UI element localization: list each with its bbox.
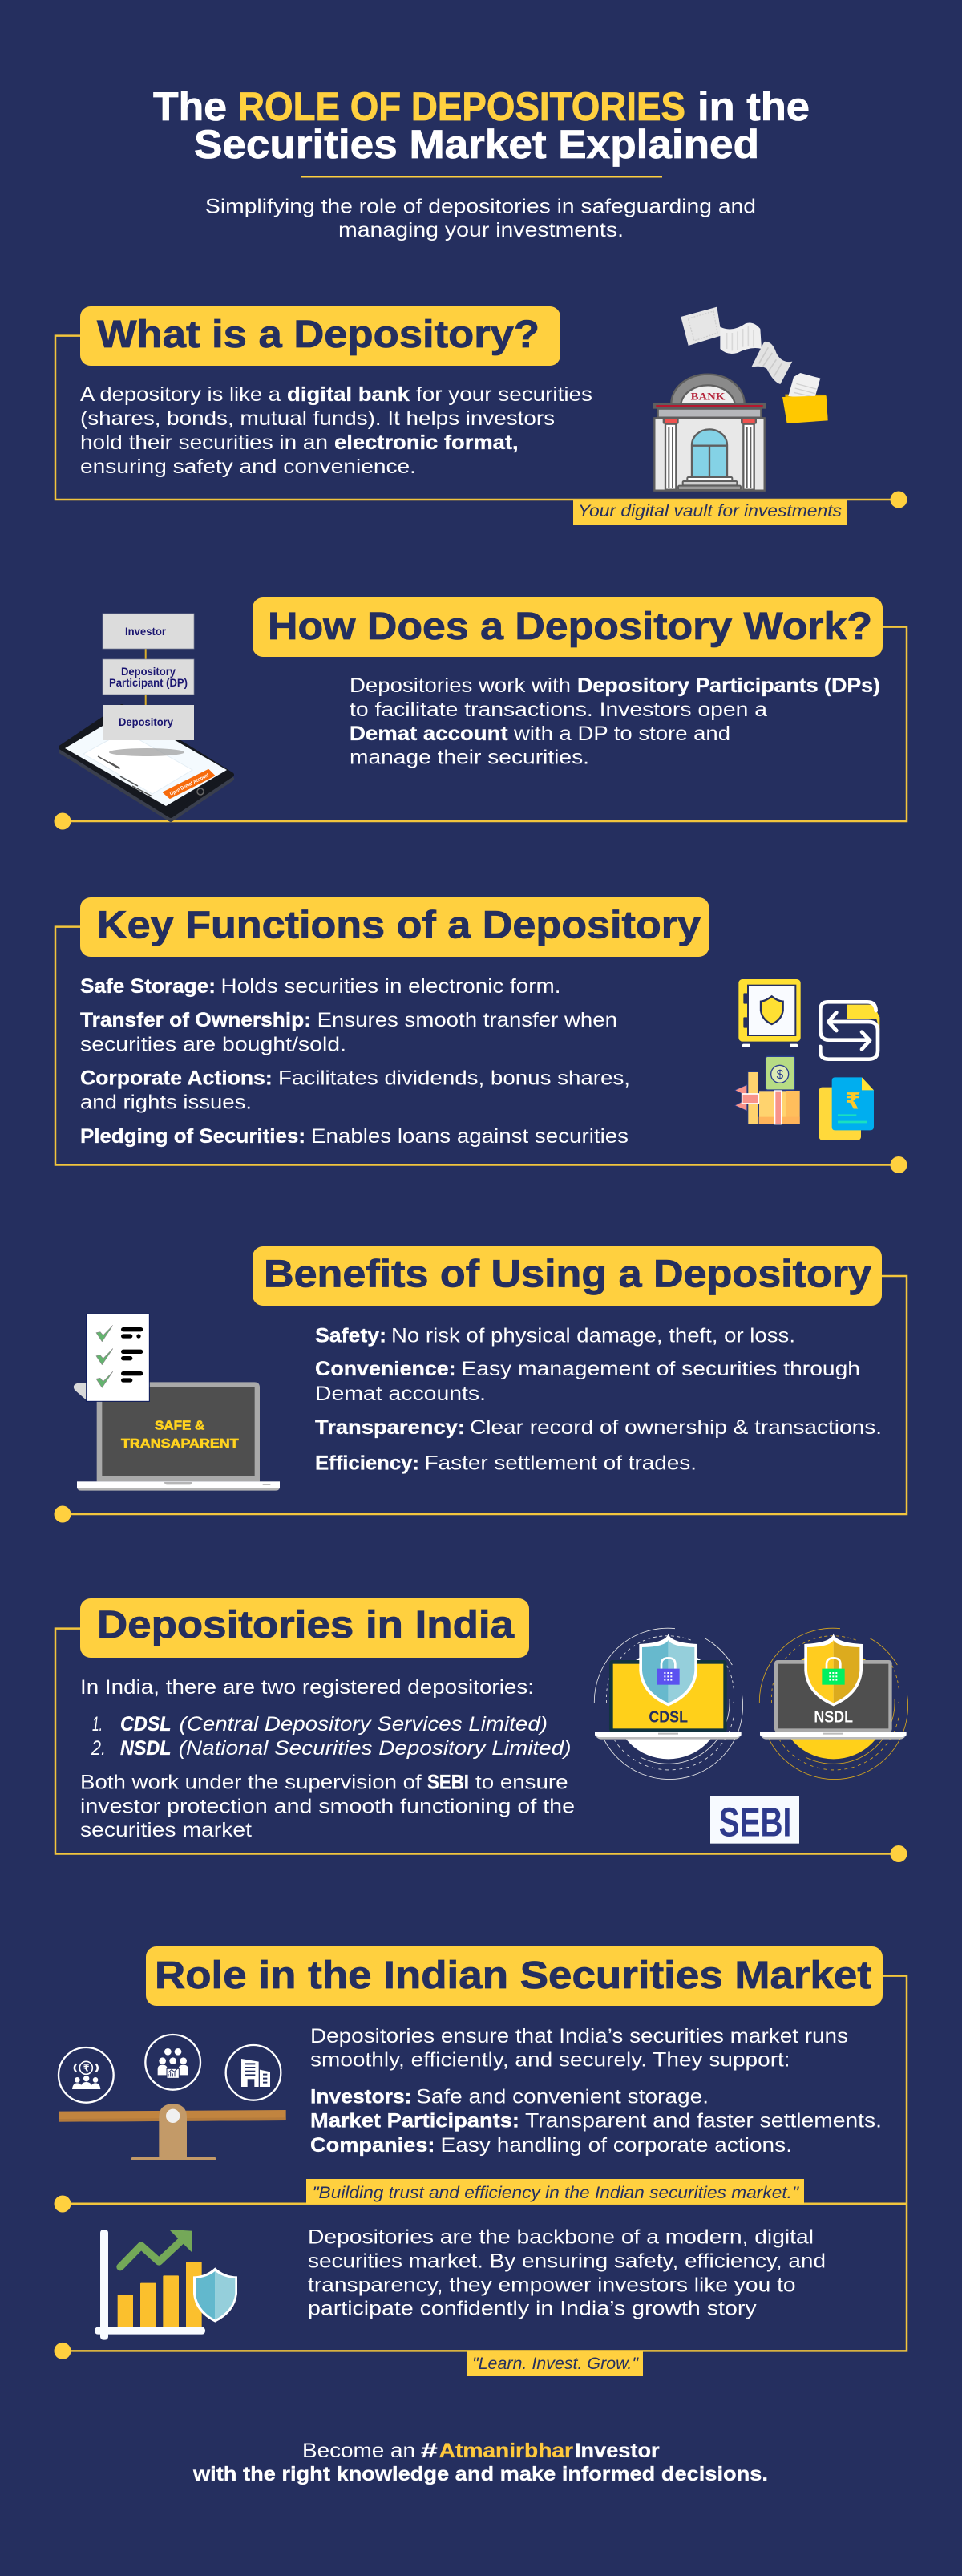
subtitle — [205, 196, 756, 241]
text block: backbone — [308, 2226, 826, 2320]
text block: Demat account — [350, 723, 508, 745]
text block: with a DP to store and — [513, 723, 730, 745]
text block: Clear record of ownership & transactions. — [470, 1416, 882, 1439]
icon: phone with demat account screen: Open Demat Account — [169, 772, 211, 797]
icon: sebi logo: SEBI — [719, 1799, 791, 1845]
icon: nsdl badge: NSDL — [814, 1708, 853, 1726]
heading — [253, 597, 883, 657]
callout — [467, 2351, 643, 2376]
panel: how does a depository work — [55, 597, 907, 829]
text block: Transfer of Ownership: — [80, 1009, 311, 1031]
heading: Key Functions of a Depository — [97, 905, 701, 946]
flow box: investor: Investor — [125, 626, 167, 638]
text block: investor protection and smooth functioning of the — [80, 1796, 575, 1818]
callout: "Learn. Invest. Grow." — [472, 2355, 640, 2373]
icon: companies — [226, 2045, 281, 2100]
text block: Both work under the supervision of — [80, 1772, 422, 1794]
text block: market support — [310, 2025, 882, 2157]
text block: market support: Depositories ensure that India’s securities market runs — [310, 2025, 848, 2047]
title: The — [153, 84, 227, 129]
icon: rupee document: ₹ — [845, 1088, 861, 1115]
text block: market support: Safe and convenient storage. — [416, 2086, 709, 2108]
icon: transfer arrows — [820, 1002, 879, 1059]
heading — [80, 1598, 529, 1658]
text block: electronic format, — [334, 431, 519, 454]
title: Securities Market Explained — [194, 122, 759, 167]
icon: investors: ₹ — [83, 2063, 90, 2074]
icon: dividends gift box: $ — [777, 1068, 784, 1082]
text block — [350, 674, 880, 768]
footer call to action: Atmanirbhar — [439, 2440, 573, 2462]
text block: Safe Storage: — [80, 975, 216, 998]
text block: Efficiency: — [315, 1452, 419, 1475]
icons: storage, transfer, corporate actions, pledging — [735, 979, 879, 1140]
heading: How Does a Depository Work? — [268, 606, 872, 648]
heading — [253, 1246, 882, 1306]
panel: depositories in india — [55, 1598, 908, 1862]
text block: manage their securities. — [350, 746, 589, 768]
text block: Holds securities in electronic form. — [221, 975, 561, 998]
text block: for your securities — [416, 383, 592, 406]
text block: and rights issues. — [80, 1092, 252, 1114]
icon: market participants — [145, 2035, 200, 2090]
text block: (shares, bonds, mutual funds). It helps investors — [80, 407, 555, 430]
flow box: depository participant: Participant (DP) — [109, 677, 188, 689]
title — [153, 84, 810, 167]
text block: CDSL — [120, 1713, 172, 1736]
text block: Corporate Actions: — [80, 1067, 273, 1089]
flow box: investor — [103, 614, 194, 649]
icon: investors — [59, 2047, 114, 2103]
icon: laptop with checklist: SAFE & — [155, 1419, 205, 1432]
text block: digital bank — [287, 383, 410, 406]
text block — [80, 1676, 575, 1841]
heading: What is a Depository? — [97, 314, 540, 356]
text block: Easy management of securities through — [462, 1358, 860, 1380]
text block: market support: Market Participants: — [310, 2109, 519, 2132]
text block: No risk of physical damage, theft, or loss. — [391, 1325, 795, 1347]
text block: NSDL — [120, 1737, 172, 1760]
icon: dividends gift box — [735, 1056, 800, 1124]
text block: to facilitate transactions. Investors open a — [350, 699, 767, 721]
panel: benefits — [55, 1246, 907, 1522]
heading — [80, 897, 709, 957]
text block: A depository is like a — [80, 383, 281, 406]
panel: what is a depository — [55, 306, 907, 525]
text block: Pledging of Securities: — [80, 1125, 305, 1148]
flow box: depository — [103, 705, 194, 740]
icon: cdsl badge — [594, 1628, 743, 1780]
callout — [306, 2179, 804, 2204]
heading — [80, 306, 560, 366]
text block: Ensures smooth transfer when — [317, 1009, 617, 1031]
text block: Safety: — [315, 1325, 386, 1347]
flow box: depository participant — [103, 659, 194, 695]
text block: backbone: transparency, they empower investors like you to — [308, 2274, 796, 2296]
text block: market support: smoothly, efficiently, and securely. They support: — [310, 2049, 790, 2072]
text block: backbone: securities market. By ensuring safety, efficiency, and — [308, 2250, 826, 2273]
text block — [80, 975, 630, 1148]
text block: 1. — [92, 1713, 103, 1736]
icon: nsdl badge — [759, 1628, 908, 1780]
text block: market support: Easy handling of corporate actions. — [441, 2134, 792, 2157]
callout — [573, 500, 847, 525]
text block: Transparency: — [315, 1416, 465, 1439]
text block: Depository Participants (DPs) — [577, 674, 880, 697]
icon: laptop with checklist — [74, 1314, 280, 1491]
flow box: depository participant: Depository — [121, 666, 176, 678]
subtitle: Simplifying the role of depositories in safeguarding and — [205, 196, 756, 218]
icon: safe — [738, 979, 801, 1047]
header — [153, 84, 810, 241]
heading: Role in the Indian Securities Market — [155, 1954, 871, 1997]
text block: SEBI — [427, 1772, 469, 1794]
icons: cdsl, nsdl and sebi — [594, 1628, 908, 1845]
title: in the — [697, 84, 810, 129]
text block: Convenience: — [315, 1358, 456, 1380]
text block: (National Securities Depository Limited) — [179, 1737, 571, 1760]
icon: cdsl badge: CDSL — [649, 1708, 688, 1726]
footer call to action — [192, 2440, 768, 2485]
text block: ensuring safety and convenience. — [80, 456, 416, 478]
panel: role in the indian securities market — [55, 1946, 907, 2376]
text block: Enables loans against securities — [311, 1125, 629, 1148]
text block: Depositories work with — [350, 674, 571, 697]
heading — [146, 1946, 883, 2006]
chart: investor to depository flow — [103, 614, 194, 740]
callout: Your digital vault for investments — [578, 502, 843, 520]
text block — [315, 1325, 882, 1475]
icon: bank with documents and folder — [653, 307, 828, 491]
icon: growth chart with shield — [95, 2230, 237, 2340]
text block: Facilitates dividends, bonus shares, — [278, 1067, 630, 1089]
icon: phone with demat account screen — [61, 707, 232, 820]
text block: market support: Companies: — [310, 2134, 435, 2157]
text block: hold their securities in an — [80, 431, 328, 454]
heading: Benefits of Using a Depository — [264, 1253, 871, 1296]
flow box: depository: Depository — [119, 716, 173, 728]
text block: market support: Investors: — [310, 2086, 412, 2108]
footer call to action: Investor — [575, 2440, 660, 2462]
footer call to action: with the right knowledge and make informed decisions. — [192, 2463, 768, 2485]
title: ROLE OF DEPOSITORIES — [238, 84, 685, 129]
text block: backbone: participate confidently in India’s growth story — [308, 2298, 757, 2320]
text block — [80, 383, 592, 478]
subtitle: managing your investments. — [338, 219, 624, 241]
text block: Demat accounts. — [315, 1383, 486, 1405]
icon: balance scale with three stakeholders — [59, 2035, 286, 2160]
text block: to ensure — [475, 1772, 568, 1794]
footer call to action: Become an — [302, 2440, 415, 2462]
icon: laptop with checklist: TRANSAPARENT — [121, 1437, 239, 1451]
footer call to action: # — [421, 2440, 438, 2462]
panel: key functions — [55, 897, 907, 1173]
text block: 2. — [91, 1737, 106, 1760]
callout: "Building trust and efficiency in the Indian securities market." — [313, 2184, 800, 2202]
icon: rupee document — [819, 1077, 874, 1140]
icon: bank with documents and folder: BANK — [691, 391, 725, 402]
text block: Faster settlement of trades. — [425, 1452, 697, 1475]
text block: securities market — [80, 1819, 252, 1841]
heading: Depositories in India — [97, 1604, 514, 1646]
text block: (Central Depository Services Limited) — [180, 1713, 548, 1736]
text block: In India, there are two registered depositories: — [80, 1676, 534, 1699]
text block: market support: Transparent and faster settlements. — [525, 2109, 882, 2132]
text block: securities are bought/sold. — [80, 1034, 346, 1056]
text block: backbone: Depositories are the backbone of a modern, digital — [308, 2226, 814, 2249]
